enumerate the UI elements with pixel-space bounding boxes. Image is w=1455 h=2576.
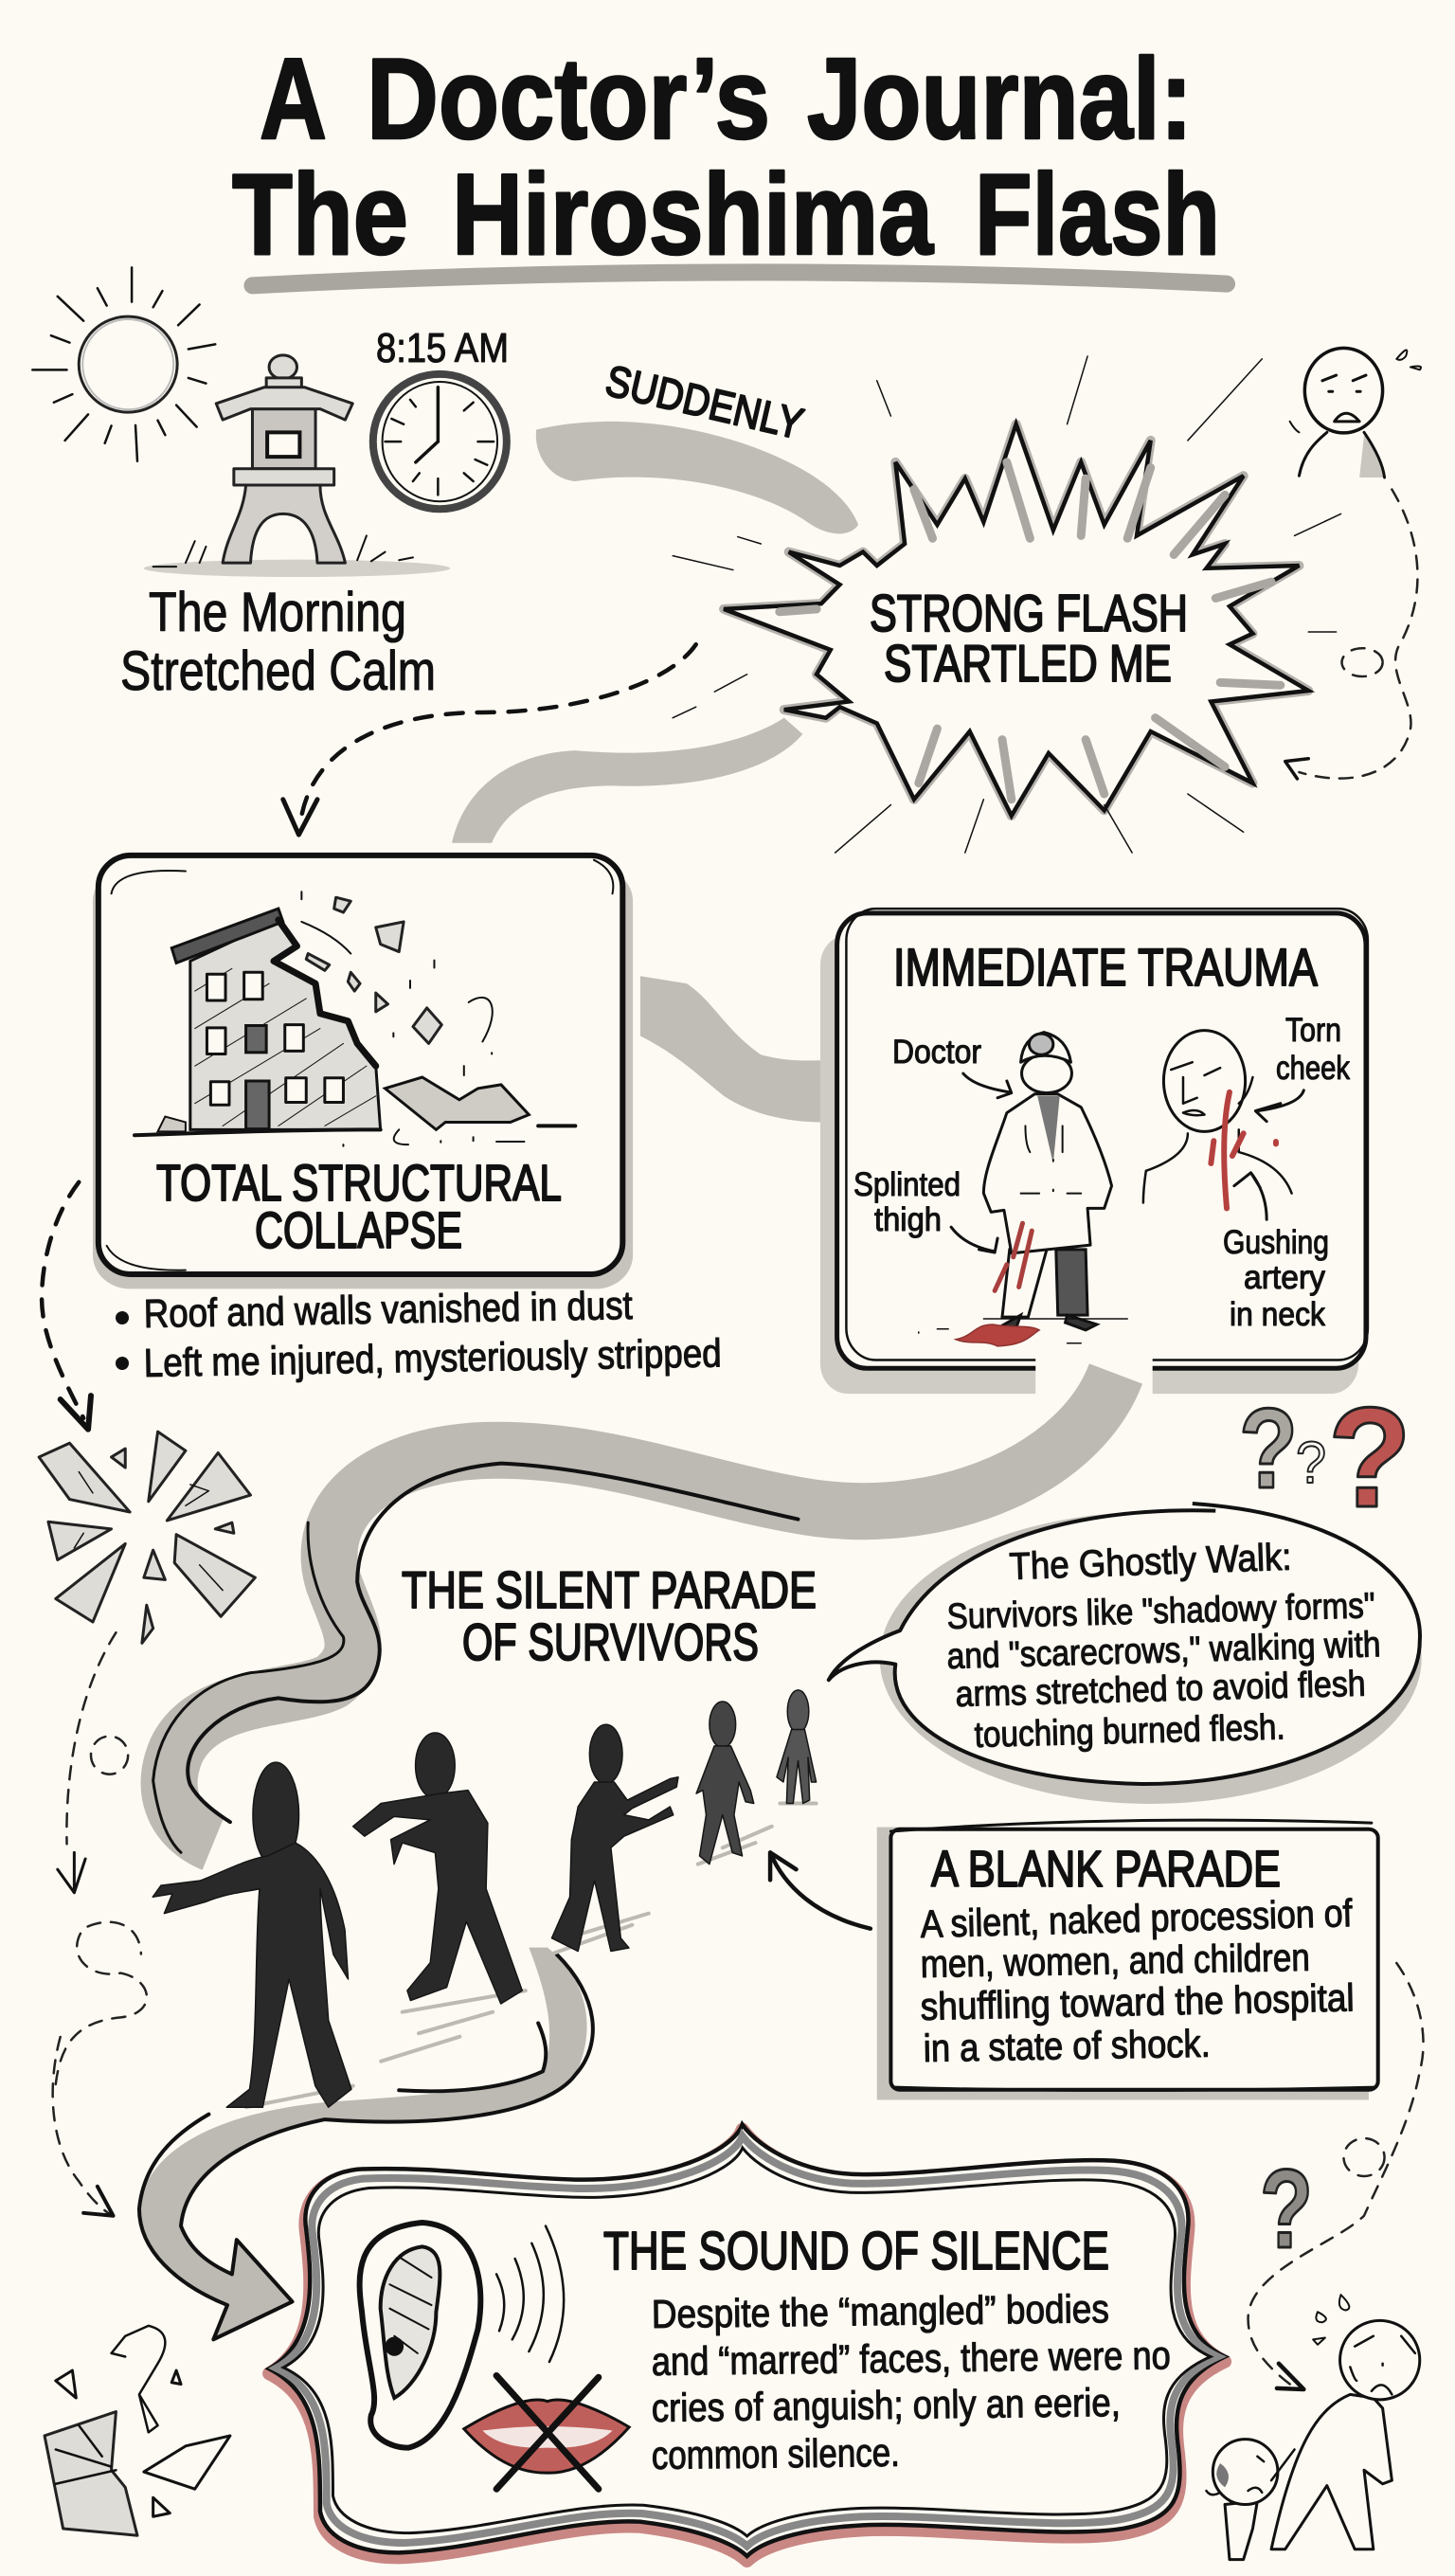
- panel: immediate trauma: thigh: [874, 1201, 942, 1238]
- dashed arrow: left lower: [53, 2037, 114, 2216]
- panel: the sound of silence: [269, 2125, 1225, 2561]
- lower ribbon to silence frame: [139, 1948, 593, 2339]
- burst: strong flash: [673, 356, 1341, 853]
- title: Doctor’s: [367, 34, 770, 163]
- icon: collapsing building: [135, 892, 575, 1146]
- panel: total structural collapse: TOTAL STRUCTURAL: [156, 1155, 562, 1212]
- icons: question marks: ?: [1239, 1385, 1298, 1512]
- title: Hiroshima: [452, 150, 934, 279]
- panel: the sound of silence: Despite the “mangled” bodies: [652, 2286, 1109, 2336]
- bullet list: collapse facts: [116, 1283, 722, 1385]
- silhouette: figure 5: [777, 1690, 817, 1803]
- panel: the sound of silence: and “marred” faces, there were no: [652, 2333, 1171, 2384]
- winding ribbon: parade path: [153, 1374, 1116, 1852]
- silhouette: figure 3: [551, 1724, 678, 1952]
- title underline: [252, 272, 1227, 285]
- speech bubble: the ghostly walk: touching burned flesh.: [974, 1707, 1285, 1756]
- heading: silent parade: [402, 1560, 817, 1671]
- caption: morning calm: [120, 582, 436, 702]
- icon: worried person: [1290, 348, 1421, 477]
- clock time label: 8:15 AM: [376, 325, 509, 371]
- icons: question marks: [1239, 1378, 1411, 1537]
- silhouettes: silent parade figures: [153, 1690, 817, 2107]
- caption: morning calm: The Morning: [149, 582, 406, 643]
- dashed arrow: left upper: [42, 1182, 91, 1430]
- panel: a blank parade: shuffling toward the hospital: [920, 1975, 1355, 2028]
- heading: silent parade: THE SILENT PARADE: [402, 1560, 817, 1619]
- panel: immediate trauma: Splinted: [853, 1166, 961, 1203]
- panel: a blank parade: A BLANK PARADE: [931, 1841, 1281, 1898]
- dashed arrow: right lower: [1248, 1963, 1424, 2389]
- icon: ear with sound waves: [360, 2223, 564, 2448]
- label: suddenly: SUDDENLY: [602, 355, 808, 448]
- icon: sun: [32, 267, 215, 461]
- panel: total structural collapse: COLLAPSE: [255, 1202, 462, 1259]
- footprints trail: [246, 1803, 817, 2107]
- burst text: [870, 584, 1188, 693]
- figure: injured face: [1143, 1031, 1292, 1208]
- icon: clock: [373, 374, 507, 509]
- icon: shattered glass: [39, 1432, 255, 1643]
- speech bubble: the ghostly walk: [829, 1504, 1422, 1804]
- speech bubble: the ghostly walk: The Ghostly Walk:: [1009, 1537, 1292, 1588]
- silhouette: figure 4: [696, 1702, 754, 1864]
- speech bubble: the ghostly walk: arms stretched to avoid flesh: [955, 1665, 1366, 1715]
- heading: silent parade: OF SURVIVORS: [462, 1612, 759, 1671]
- dashed arrow: to structural collapse: [283, 644, 696, 835]
- bullet list: collapse facts: Roof and walls vanished in dust: [143, 1283, 633, 1336]
- panel: immediate trauma: [820, 909, 1368, 1397]
- panel: total structural collapse: [93, 856, 633, 1288]
- bullet list: collapse facts: Left me injured, mysteriously stripped: [143, 1330, 722, 1385]
- speech bubble: the ghostly walk: and "scarecrows," walking with: [946, 1625, 1381, 1677]
- title: Journal:: [807, 34, 1193, 163]
- title: Flash: [975, 150, 1220, 279]
- figure: injured doctor: [919, 1033, 1127, 1346]
- panel: immediate trauma: in neck: [1230, 1296, 1325, 1333]
- figures: adult and child in shock: [1206, 2295, 1420, 2560]
- gray question mark: ?: [1260, 2147, 1313, 2272]
- burst text: STRONG FLASH: [870, 584, 1188, 642]
- speech bubble: the ghostly walk: Survivors like "shadowy forms": [946, 1586, 1375, 1637]
- dashed line: left middle: [56, 1632, 147, 2084]
- panel: immediate trauma: IMMEDIATE TRAUMA: [893, 937, 1319, 997]
- brush stroke to flash: [536, 422, 858, 533]
- brush stroke below flash: [452, 718, 802, 843]
- title: The: [232, 150, 408, 279]
- icons: question marks: ?: [1328, 1378, 1411, 1537]
- silhouette: figure 2: [353, 1733, 522, 2004]
- ornate frame: [269, 2125, 1225, 2561]
- title: [232, 34, 1220, 279]
- arrow: blank parade to figures: [770, 1852, 871, 1929]
- panel: immediate trauma: Torn: [1285, 1012, 1341, 1049]
- panel: the sound of silence: common silence.: [652, 2430, 900, 2477]
- panel: a blank parade: A silent, naked procession of: [920, 1891, 1354, 1946]
- panel: a blank parade: [877, 1820, 1378, 2099]
- panel: the sound of silence: cries of anguish; only an eerie,: [652, 2380, 1121, 2430]
- icons: question marks: ?: [1296, 1431, 1326, 1496]
- title: A: [260, 34, 327, 163]
- dashed arrow: right loop: [1285, 490, 1417, 779]
- icon: crossed-out lips: [464, 2375, 629, 2489]
- panel: immediate trauma: Doctor: [892, 1034, 981, 1071]
- icon: stone lantern: [144, 355, 450, 577]
- icon: broken shards with question mark: [45, 2326, 230, 2535]
- panel: a blank parade: men, women, and children: [920, 1936, 1310, 1986]
- panel: a blank parade: in a state of shock.: [923, 2022, 1211, 2070]
- burst text: STARTLED ME: [884, 634, 1172, 693]
- panel: immediate trauma: cheek: [1276, 1050, 1350, 1087]
- panel: immediate trauma: Gushing: [1223, 1224, 1329, 1261]
- panel: the sound of silence: THE SOUND OF SILENCE: [603, 2221, 1109, 2281]
- caption: morning calm: Stretched Calm: [120, 640, 436, 702]
- brush stroke between panels: [640, 976, 821, 1122]
- panel: immediate trauma: artery: [1244, 1259, 1325, 1296]
- arrows: body labels: [951, 1073, 1303, 1252]
- silhouette: figure 1: [153, 1762, 351, 2107]
